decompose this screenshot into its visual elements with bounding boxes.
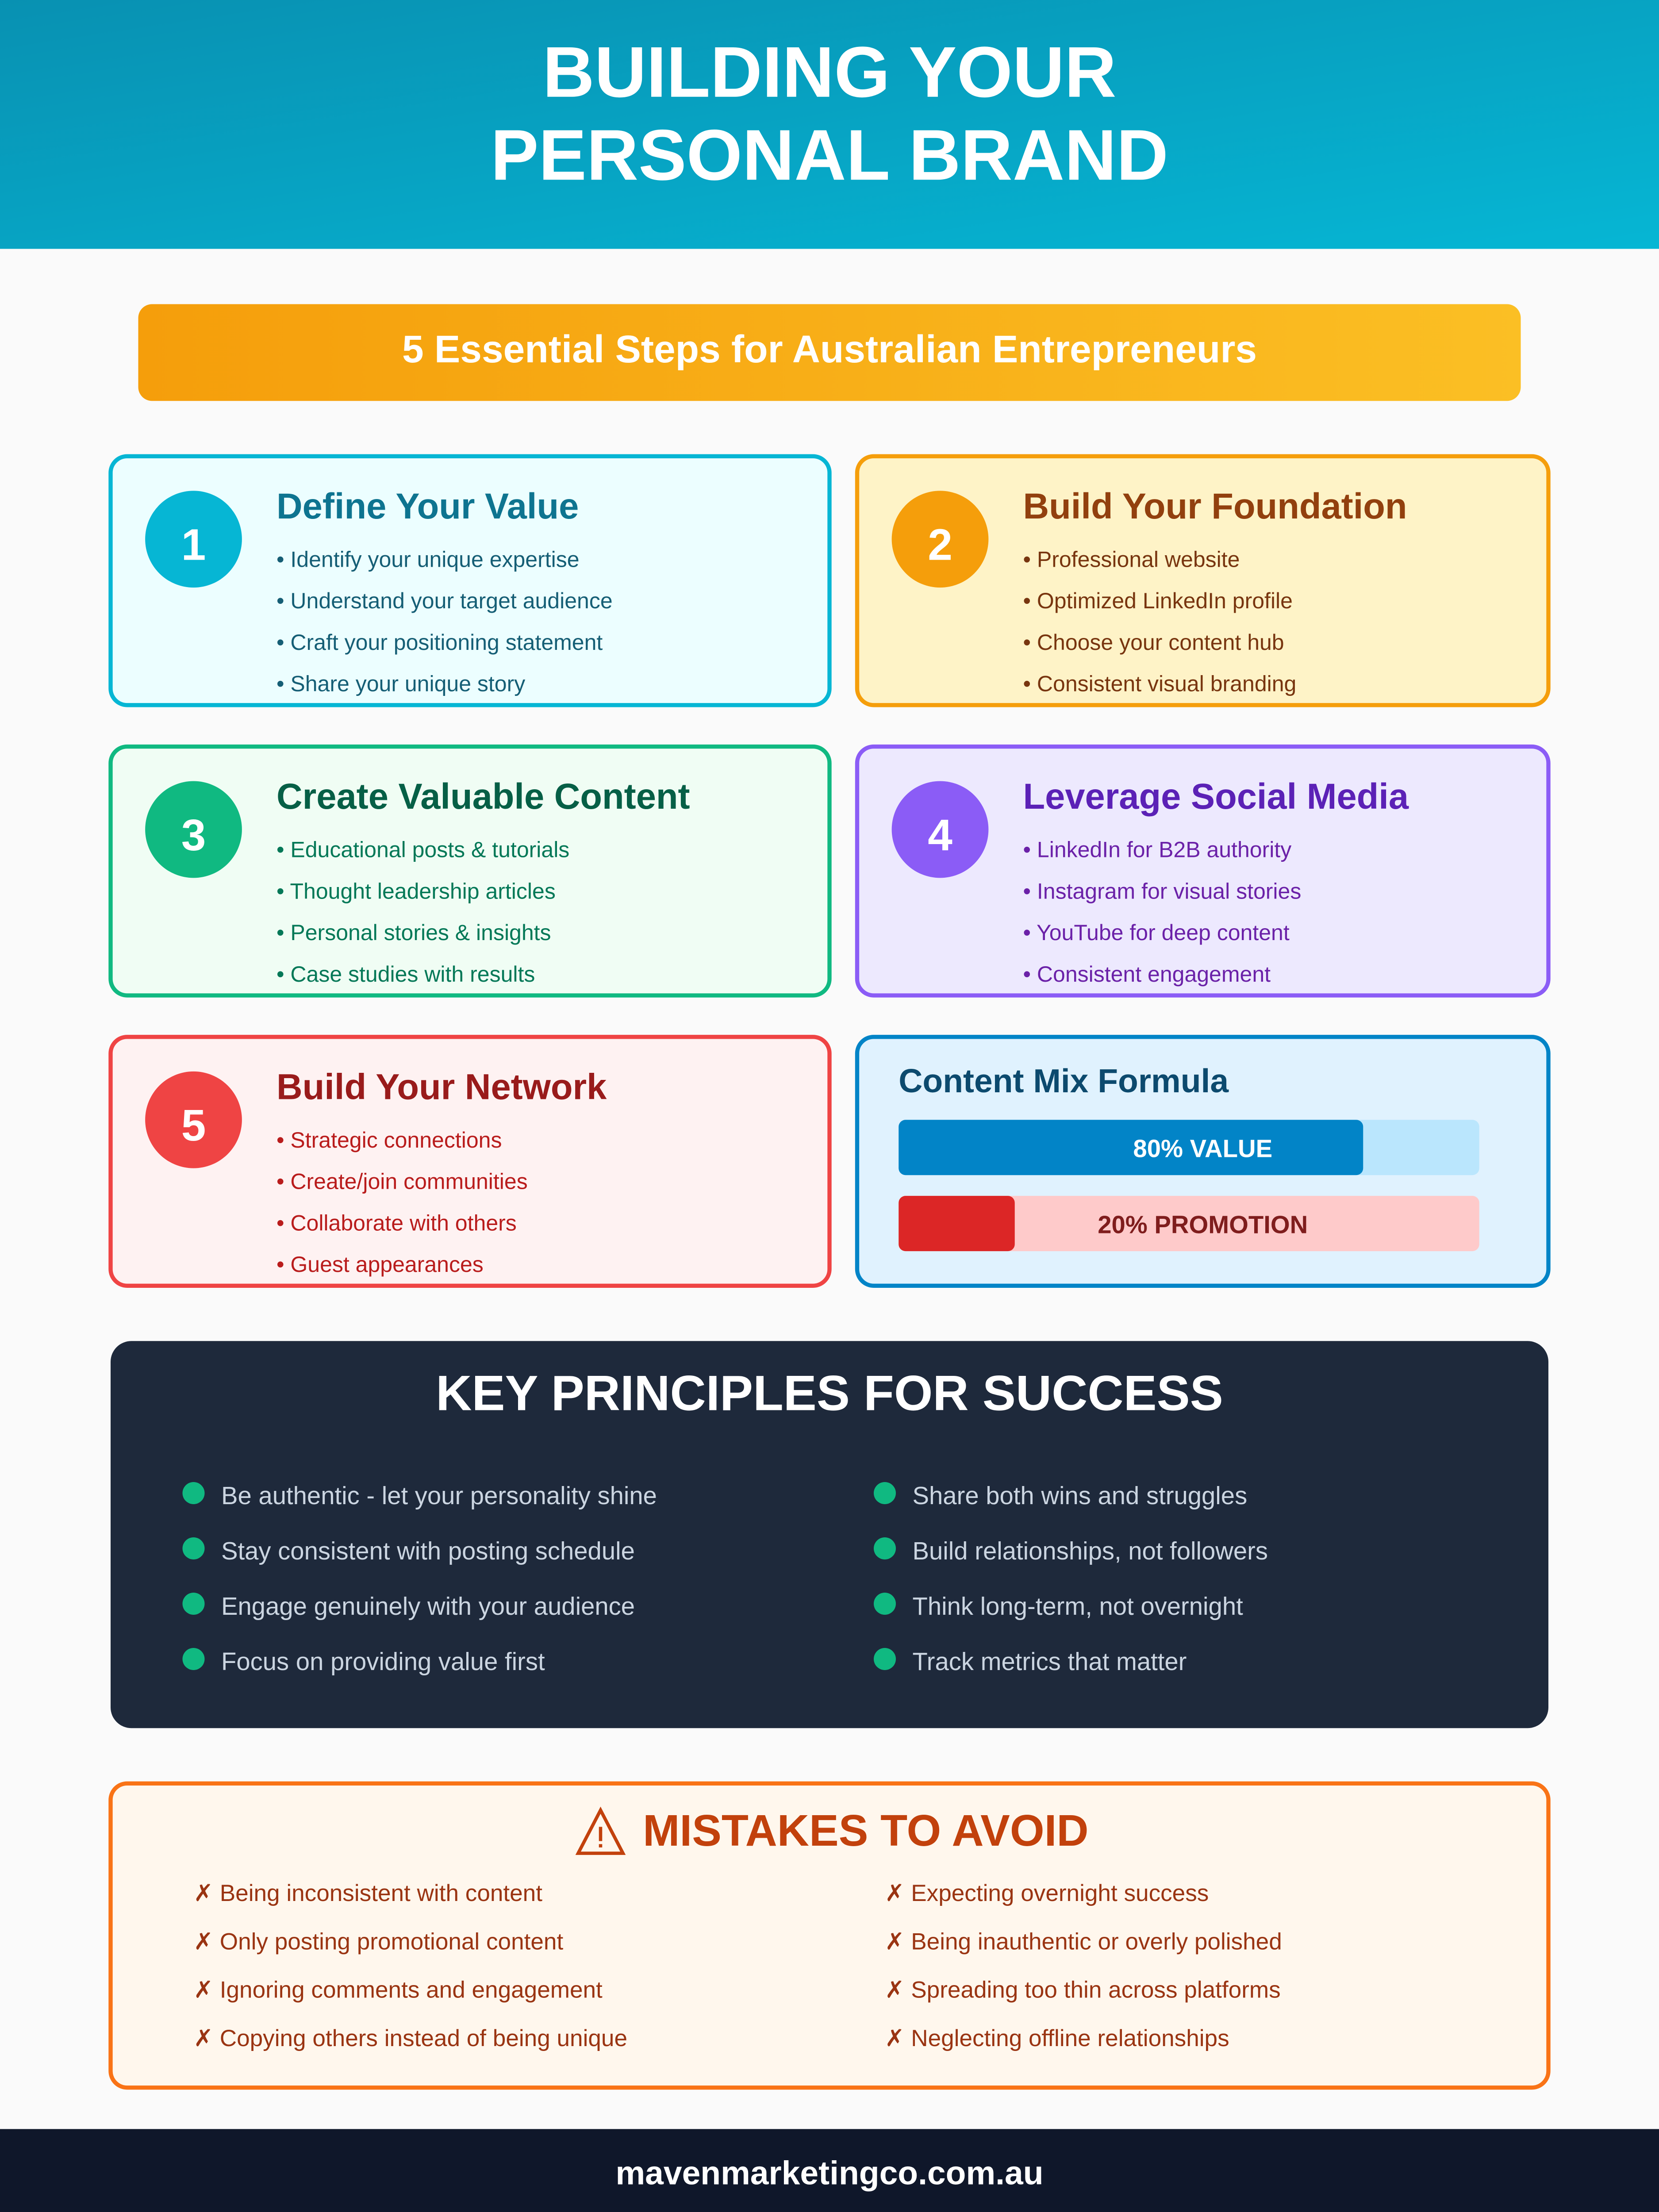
panel: step 3 create valuable content <box>111 747 830 995</box>
bar: 20% promotion <box>899 1196 1479 1251</box>
bar: 80% value: 80% VALUE <box>1133 1135 1272 1163</box>
step 2 list <box>1023 547 1296 696</box>
step 4 list: • Instagram for visual stories <box>1023 879 1301 903</box>
step 2 number badge <box>892 491 988 588</box>
title: PERSONAL BRAND <box>491 115 1168 195</box>
subtitle banner: 5 Essential Steps for Australian Entrepreneurs <box>402 327 1257 371</box>
principles right column: Share both wins and struggles <box>912 1482 1247 1509</box>
mistakes left column <box>194 1880 627 2051</box>
subtitle banner <box>138 304 1521 401</box>
mistakes left column: ✗ Copying others instead of being unique <box>194 2025 627 2051</box>
principles right column <box>874 1482 1268 1675</box>
panel: mistakes to avoid <box>111 1783 1548 2088</box>
mistakes right column: ✗ Expecting overnight success <box>885 1880 1209 1906</box>
step 5 number badge <box>145 1071 242 1168</box>
step 3 list: • Thought leadership articles <box>276 879 556 903</box>
step 3 list: • Case studies with results <box>276 962 535 987</box>
mistakes right column: ✗ Neglecting offline relationships <box>885 2025 1229 2051</box>
header <box>0 0 1659 249</box>
step 3 number badge: 3 <box>181 810 206 860</box>
principles left column: Engage genuinely with your audience <box>221 1592 635 1620</box>
panel: content mix formula <box>857 1037 1548 1286</box>
step 4 list: • Consistent engagement <box>1023 962 1271 987</box>
step 3 list: • Educational posts & tutorials <box>276 837 569 862</box>
step 4 list: • LinkedIn for B2B authority <box>1023 837 1291 862</box>
mistakes heading: MISTAKES TO AVOID <box>643 1806 1089 1855</box>
key principles heading: KEY PRINCIPLES FOR SUCCESS <box>436 1365 1223 1421</box>
principles left column: Focus on providing value first <box>221 1647 545 1675</box>
step 1 heading: Define Your Value <box>276 486 579 526</box>
mistakes right column <box>885 1880 1282 2051</box>
mistakes left column: ✗ Ignoring comments and engagement <box>194 1977 603 2003</box>
step 5 list <box>276 1128 528 1277</box>
footer <box>0 2129 1659 2212</box>
step 1 number badge <box>145 491 242 588</box>
principles right column: Track metrics that matter <box>912 1647 1187 1675</box>
step 5 list: • Create/join communities <box>276 1169 528 1194</box>
mistakes right column: ✗ Spreading too thin across platforms <box>885 1977 1281 2003</box>
panel: key principles <box>111 1341 1548 1728</box>
bar: 80% value <box>899 1120 1479 1175</box>
title: BUILDING YOUR <box>542 32 1117 112</box>
principles left column: Be authentic - let your personality shine <box>221 1482 657 1509</box>
step 5 number badge: 5 <box>181 1101 206 1150</box>
step 1 list: • Craft your positioning statement <box>276 630 603 655</box>
step 2 number badge: 2 <box>928 520 952 570</box>
step 3 number badge <box>145 781 242 878</box>
mistakes right column: ✗ Being inauthentic or overly polished <box>885 1928 1282 1955</box>
step 5 list: • Collaborate with others <box>276 1210 517 1235</box>
step 1 list: • Identify your unique expertise <box>276 547 580 572</box>
step 4 number badge: 4 <box>928 810 952 860</box>
principles left column: Stay consistent with posting schedule <box>221 1537 635 1565</box>
panel: step 2 build your foundation <box>857 456 1548 705</box>
step 3 heading: Create Valuable Content <box>276 776 690 817</box>
step 5 heading: Build Your Network <box>276 1067 607 1107</box>
step 1 list: • Share your unique story <box>276 671 525 696</box>
step 2 list: • Consistent visual branding <box>1023 671 1296 696</box>
step 2 list: • Professional website <box>1023 547 1240 572</box>
step 2 list: • Choose your content hub <box>1023 630 1284 655</box>
panel: step 4 leverage social media <box>857 747 1548 995</box>
step 4 number badge <box>892 781 988 878</box>
principles left column <box>182 1482 657 1675</box>
step 1 list <box>276 547 613 696</box>
principles right column: Think long-term, not overnight <box>912 1592 1243 1620</box>
footer: mavenmarketingco.com.au <box>615 2154 1044 2191</box>
step 4 heading: Leverage Social Media <box>1023 776 1409 817</box>
bar: 20% promotion: 20% PROMOTION <box>1098 1210 1308 1238</box>
step 2 list: • Optimized LinkedIn profile <box>1023 588 1293 613</box>
step 2 heading: Build Your Foundation <box>1023 486 1407 526</box>
step 1 list: • Understand your target audience <box>276 588 613 613</box>
step 1 number badge: 1 <box>181 520 206 570</box>
icon: warning triangle <box>578 1810 623 1853</box>
step 4 list <box>1023 837 1301 987</box>
step 4 list: • YouTube for deep content <box>1023 920 1290 945</box>
principles right column: Build relationships, not followers <box>912 1537 1268 1565</box>
step 3 list <box>276 837 569 987</box>
content mix heading: Content Mix Formula <box>899 1062 1229 1099</box>
panel: step 5 build your network <box>111 1037 830 1286</box>
mistakes left column: ✗ Only posting promotional content <box>194 1928 563 1955</box>
step 5 list: • Strategic connections <box>276 1128 502 1152</box>
panel: step 1 define your value <box>111 456 830 705</box>
mistakes left column: ✗ Being inconsistent with content <box>194 1880 542 1906</box>
step 5 list: • Guest appearances <box>276 1252 484 1277</box>
step 3 list: • Personal stories & insights <box>276 920 551 945</box>
